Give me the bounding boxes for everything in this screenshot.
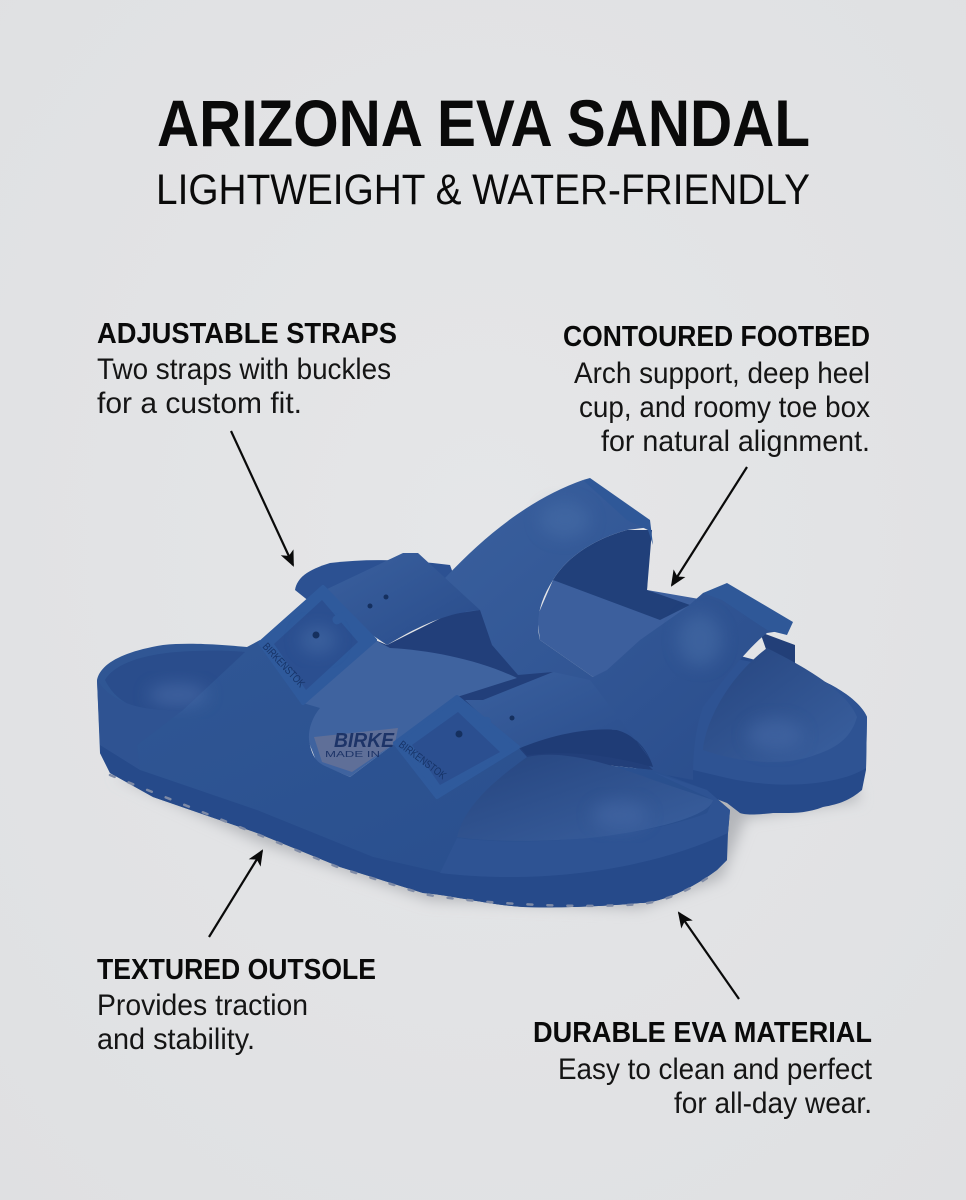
front buckle 2 frame (395, 697, 518, 797)
back sandal buckle underside wall (760, 632, 795, 672)
back sandal footbed opening (537, 530, 705, 677)
arrow: contoured footbed (672, 467, 747, 585)
back sandal strap highlights (540, 502, 722, 666)
callout: contoured footbed: cup, and roomy toe box (579, 391, 870, 424)
arrow: textured outsole (209, 851, 262, 937)
callout: contoured footbed (563, 321, 870, 458)
front toe footbed (457, 755, 713, 841)
back sandal toe footbed (703, 648, 857, 762)
callout: contoured footbed: Arch support, deep heel (574, 357, 870, 390)
ground shadow (115, 775, 860, 908)
front buckle 2 brand text: BIRKENSTOK (396, 739, 449, 782)
footbed logo plate (314, 728, 398, 772)
front toe rim (440, 772, 730, 877)
callout: durable EVA material: Easy to clean and perfect (558, 1053, 873, 1086)
callout: textured outsole: Provides traction (97, 989, 308, 1022)
front interior underfill (303, 610, 653, 797)
callout: textured outsole: TEXTURED OUTSOLE (97, 954, 376, 986)
back sandal heel rim (295, 560, 470, 620)
front buckle 2 hole (456, 730, 462, 738)
back sandal buckle 1 (583, 478, 653, 545)
back sandal (295, 478, 867, 814)
callout: durable EVA material: for all-day wear. (674, 1087, 872, 1120)
back sandal buckle 2 (703, 583, 793, 635)
front buckle 2 strap keeper (412, 712, 500, 785)
front strap 1 (325, 553, 480, 645)
front buckle 1 strap keeper (274, 600, 358, 690)
footbed made-in text: MADE IN (325, 750, 380, 759)
callout: contoured footbed: for natural alignment. (601, 425, 870, 458)
subtitle: LIGHTWEIGHT & WATER-FRIENDLY (156, 166, 810, 214)
back sandal footbed highlight (747, 719, 803, 751)
callout: textured outsole (97, 954, 376, 1056)
callout: contoured footbed: CONTOURED FOOTBED (563, 321, 870, 353)
front sandal (97, 553, 730, 907)
front sandal heel cup (105, 651, 245, 711)
callout: adjustable straps: Two straps with buckles (97, 353, 391, 386)
heel footbed highlight (148, 683, 208, 707)
title: ARIZONA EVA SANDAL (157, 86, 810, 160)
callout: textured outsole: and stability. (97, 1023, 255, 1056)
front strap 2 hole (510, 716, 514, 720)
footbed brand mark: BIRKE (334, 730, 395, 752)
back sandal main strap (445, 480, 787, 780)
front sandal outsole (100, 745, 727, 907)
callout: durable EVA material (533, 1017, 873, 1120)
callout: adjustable straps: for a custom fit. (97, 387, 302, 420)
front buckle 1 brand text: BIRKENSTOK (260, 641, 307, 690)
callout: durable EVA material: DURABLE EVA MATERIAL (533, 1017, 872, 1049)
back sandal inner wall (553, 530, 690, 620)
front sandal outsole tread (110, 775, 717, 906)
front dark underside strap 2 (520, 730, 653, 767)
callout: adjustable straps (97, 318, 397, 420)
callout: adjustable straps: ADJUSTABLE STRAPS (97, 318, 397, 350)
front sandal heel wall (97, 680, 183, 770)
arrow: durable EVA material (679, 913, 739, 999)
back sandal rim (690, 650, 867, 785)
front buckle 1 hole (312, 632, 320, 638)
front sandal sole and body (97, 640, 730, 907)
front strap 2 (465, 672, 653, 763)
front buckle 1 frame (260, 587, 375, 703)
arrow: adjustable straps (231, 431, 293, 565)
front buckle 2 pin (476, 715, 492, 729)
back sandal sole (640, 640, 867, 814)
front footbed opening (303, 640, 517, 777)
front strap 1 holes (368, 594, 388, 608)
front buckle 1 strap highlight (300, 626, 336, 654)
front footbed highlight (592, 801, 648, 829)
front buckle 1 pin (331, 611, 348, 626)
